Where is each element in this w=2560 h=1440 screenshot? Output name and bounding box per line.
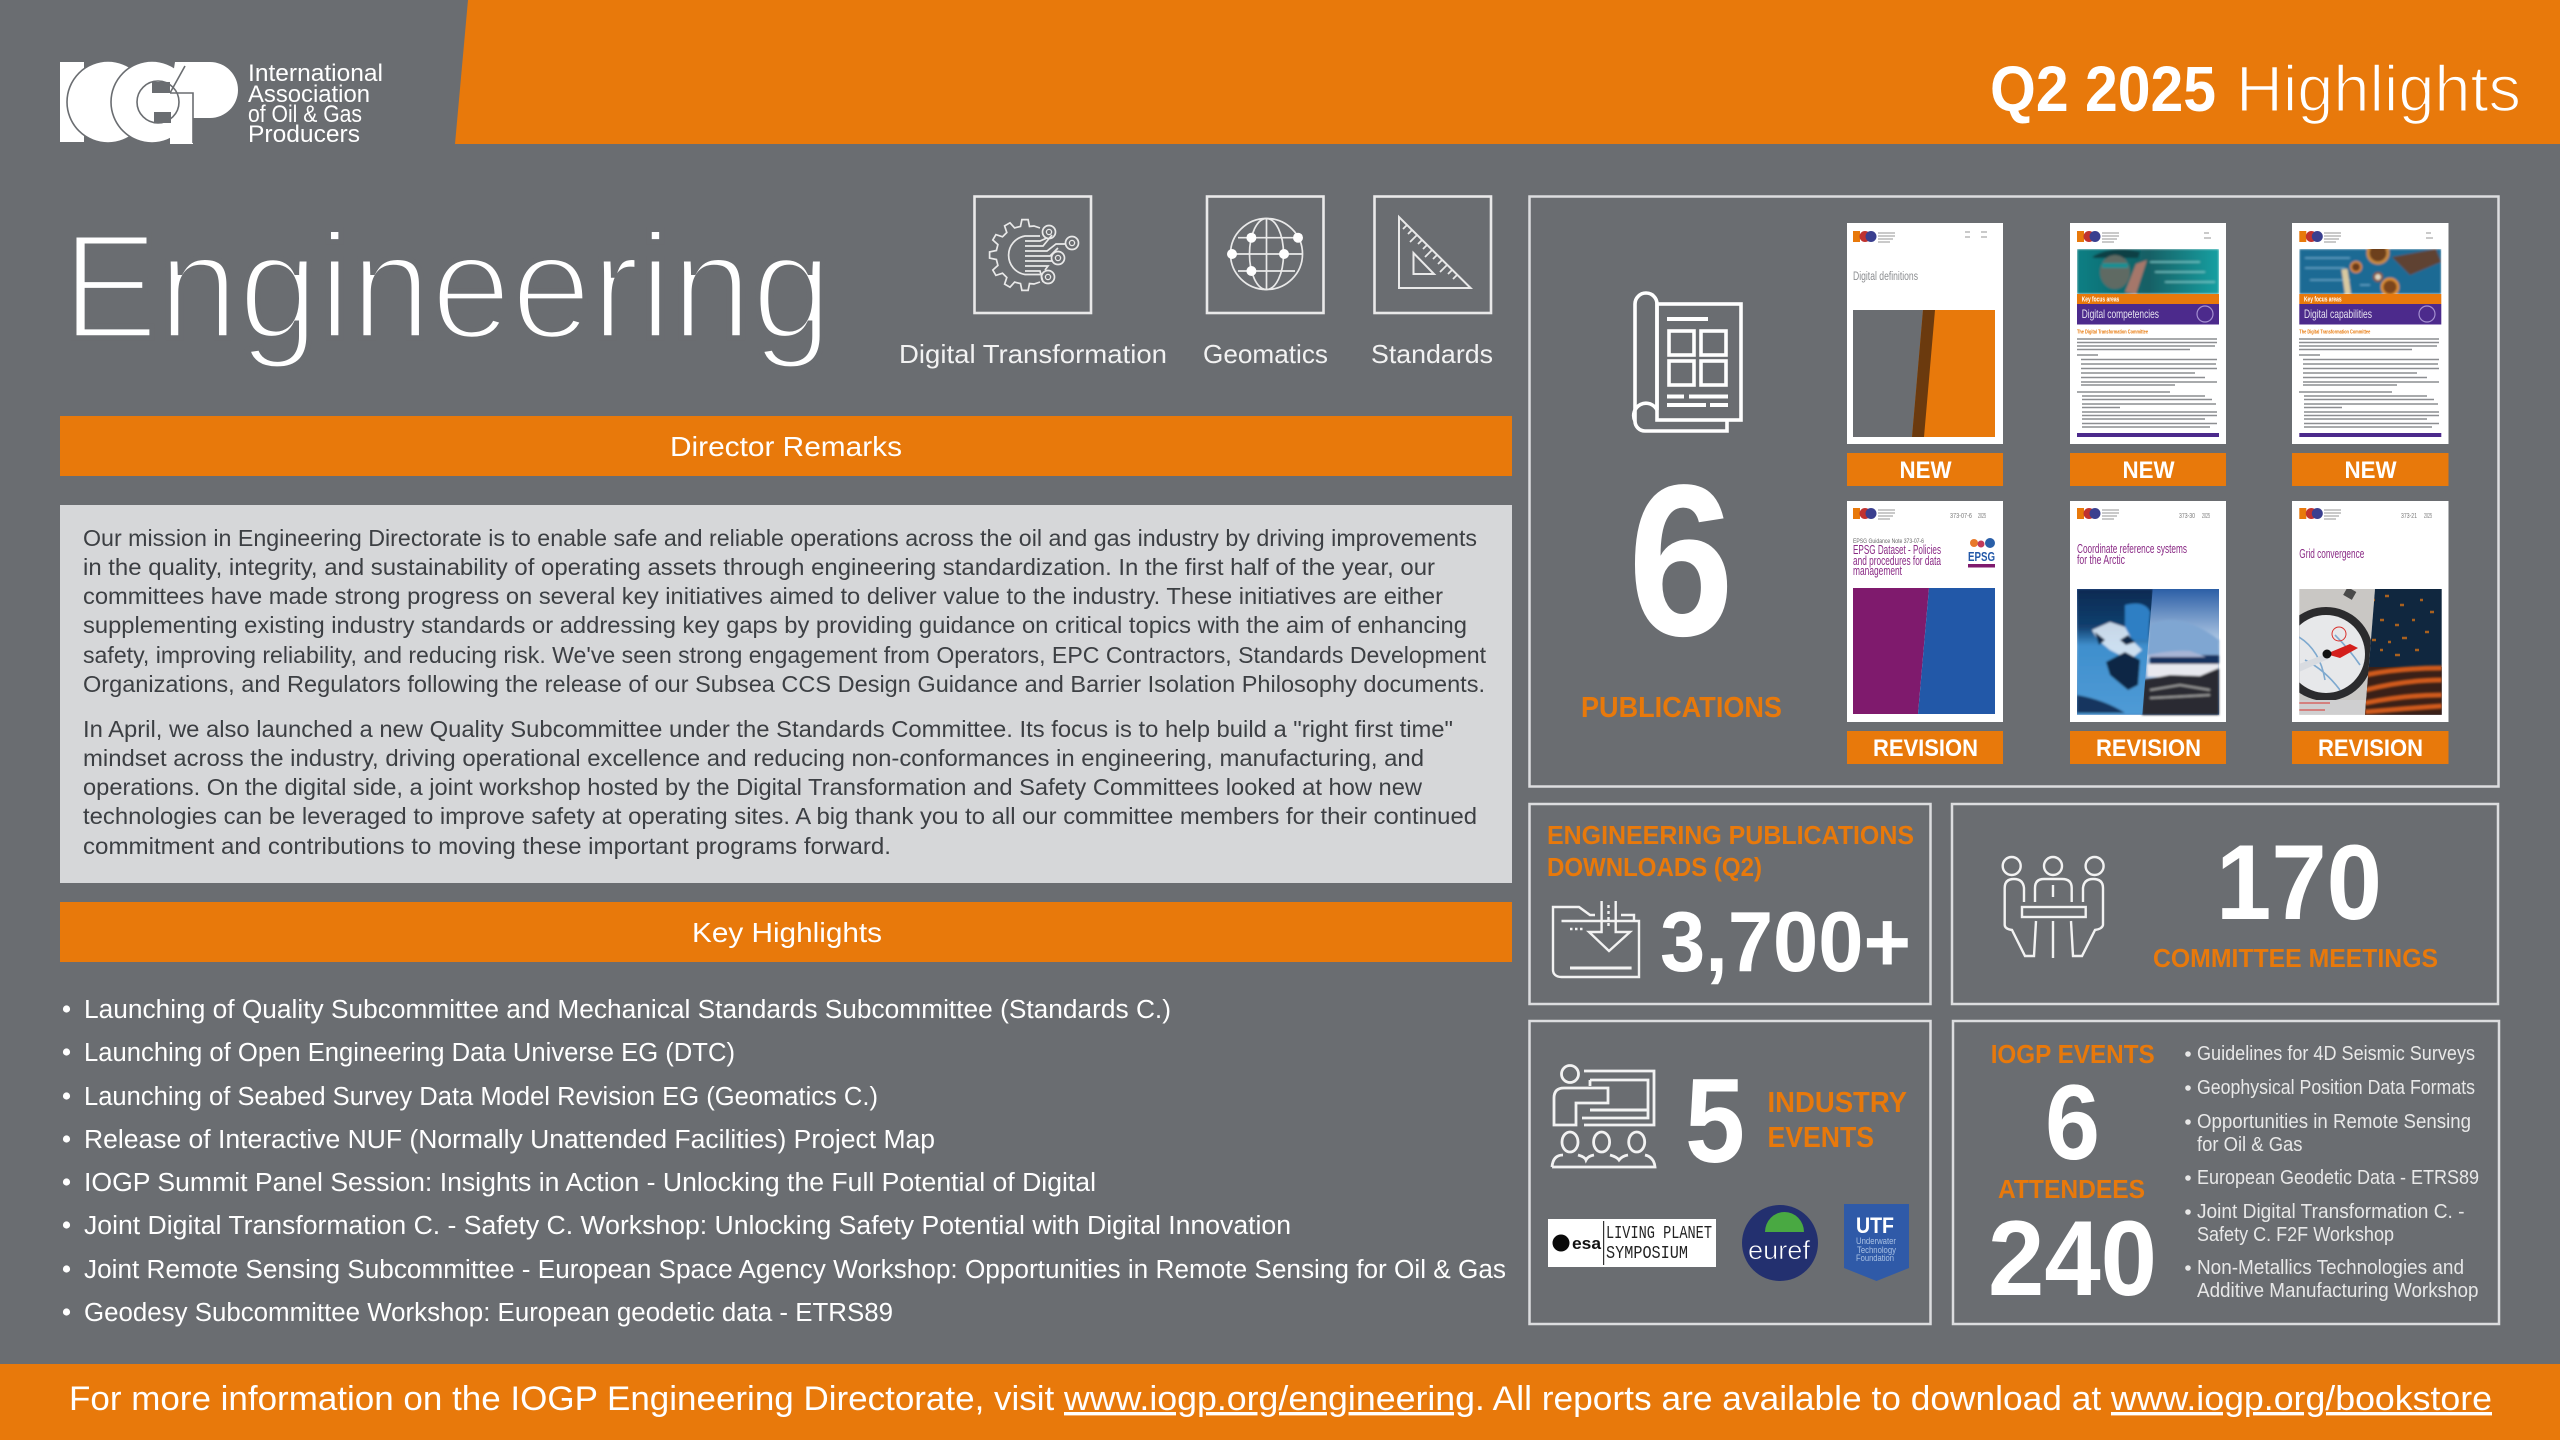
key highlights list: Launching of Seabed Survey Data Model Revision EG (Geomatics C.) (84, 1083, 878, 1111)
meetings count: 170 (2216, 822, 2382, 942)
logo wordmark: of Oil & Gas (248, 101, 362, 128)
director remarks text panel (60, 505, 1512, 883)
events list: European Geodetic Data - ETRS89 (2197, 1167, 2479, 1189)
industry events label: EVENTS (1768, 1122, 1874, 1154)
events list: Additive Manufacturing Workshop (2197, 1280, 2478, 1302)
badge: revision 1: REVISION (1873, 735, 1978, 762)
badge: revision 2: REVISION (2096, 735, 2201, 762)
header band (455, 0, 2560, 144)
thumbnail: digital capabilities: Digital capabilities (2304, 307, 2372, 321)
thumbnail: digital capabilities: Key focus areas (2304, 296, 2342, 304)
director remarks text panel: Organizations, and Regulators following the release of our Subsea CCS Design Guidance and Barrier Isolation Philosophy documents. (83, 671, 1485, 697)
logo: euref: euref (1748, 1235, 1811, 1265)
publications count: 6 (1628, 439, 1734, 681)
panel: IOGP events (1953, 1021, 2499, 1324)
events list: Joint Digital Transformation C. - (2197, 1201, 2464, 1223)
key highlights heading: Key Highlights (692, 917, 882, 948)
logo: underwater technology foundation: UTF (1856, 1213, 1894, 1238)
icon labels (899, 339, 1493, 369)
logo: underwater technology foundation: Foundation (1856, 1253, 1894, 1263)
badge: revision 2 (2070, 731, 2226, 764)
events list: for Oil & Gas (2197, 1134, 2302, 1156)
panel: publication downloads (1530, 804, 1930, 1004)
key highlights heading (60, 902, 1512, 962)
badge: new 1: NEW (1900, 457, 1952, 484)
header title (1990, 52, 2521, 125)
key highlights list: IOGP Summit Panel Session: Insights in Action - Unlocking the Full Potential of Digital (84, 1169, 1096, 1197)
thumbnail: EPSG dataset: EPSG Guidance Note 373-07-6 (1853, 538, 1924, 545)
icon: standards set square (1374, 196, 1491, 313)
footer band: www.iogp.org/bookstore (2110, 1380, 2492, 1418)
director remarks heading (60, 416, 1512, 476)
key highlights list: Release of Interactive NUF (Normally Unattended Facilities) Project Map (84, 1126, 935, 1154)
downloads heading: ENGINEERING PUBLICATIONS (1547, 820, 1914, 850)
thumbnail: EPSG dataset: 2025 (1978, 513, 1986, 520)
events list: Geophysical Position Data Formats (2197, 1077, 2475, 1099)
key highlights list (63, 996, 1506, 1327)
logo: underwater technology foundation: Technology (1857, 1245, 1896, 1255)
thumbnail: digital definitions (1847, 223, 2003, 444)
thumbnail: coordinate reference systems for the Arctic: Coordinate reference systems (2077, 542, 2187, 556)
icon: publication scroll (1634, 293, 1741, 431)
director remarks heading: Director Remarks (670, 431, 902, 462)
meetings label: COMMITTEE MEETINGS (2153, 943, 2438, 973)
publications label: PUBLICATIONS (1581, 692, 1782, 724)
badge: revision 3 (2292, 731, 2448, 764)
panel: publications (1530, 196, 2498, 786)
events list: Safety C. F2F Workshop (2197, 1224, 2394, 1246)
footer band: . All reports are available to download at (1475, 1380, 2111, 1418)
badge: new 3 (2292, 453, 2448, 486)
director remarks text panel: supplementing existing industry standards or addressing key gaps by providing guidance on critical topics with the aim of enhancing (83, 612, 1467, 638)
industry events count: 5 (1685, 1054, 1745, 1188)
icon labels: Digital Transformation (899, 339, 1167, 369)
thumbnail: digital competencies: Digital competencies (2082, 307, 2159, 321)
logo: esa living planet symposium: esa (1572, 1234, 1602, 1253)
thumbnail: coordinate reference systems for the Arctic (2070, 501, 2226, 722)
logo: esa living planet symposium (1548, 1219, 1716, 1267)
key highlights list: Geodesy Subcommittee Workshop: European geodetic data - ETRS89 (84, 1299, 893, 1327)
icon labels: Geomatics (1203, 339, 1328, 369)
director remarks text panel: technologies can be leveraged to improve safety at operating sites. A big thank you to all our committee members for their continued (83, 803, 1477, 829)
industry events label: INDUSTRY (1768, 1087, 1907, 1119)
logo: esa living planet symposium: SYMPOSIUM (1606, 1244, 1688, 1264)
director remarks text panel: mindset across the industry, driving operational excellence and reducing non-conformances in engineering, manufacturing, and (83, 745, 1424, 771)
director remarks text panel: Our mission in Engineering Directorate is to enable safe and reliable operations across the oil and gas industry by driving improvements (83, 525, 1477, 551)
attendees label: ATTENDEES (1998, 1174, 2145, 1204)
IOGP events label: IOGP EVENTS (1991, 1039, 2155, 1069)
thumbnail: EPSG dataset: management (1853, 564, 1902, 578)
logo wordmark: Producers (248, 121, 360, 148)
logo: underwater technology foundation: Underwater (1856, 1236, 1896, 1246)
director remarks text panel: operations. On the digital side, a joint workshop hosted by the Digital Transformation and Safety Committees looked at how new (83, 774, 1423, 800)
panel: committee meetings (1952, 804, 2498, 1004)
thumbnail: digital competencies: The Digital Transformation Committee (2077, 330, 2148, 336)
downloads count: 3,700+ (1660, 895, 1911, 990)
key highlights list: Joint Digital Transformation C. - Safety C. Workshop: Unlocking Safety Potential with Digital Innovation (84, 1212, 1291, 1240)
header title: Q2 2025 (1990, 53, 2216, 125)
downloads heading: DOWNLOADS (Q2) (1547, 852, 1762, 882)
page title: Engineering (62, 202, 832, 370)
badge: revision 3: REVISION (2318, 735, 2423, 762)
logo: underwater technology foundation (1844, 1204, 1909, 1281)
director remarks text panel: safety, improving reliability, and reducing risk. We've seen strong engagement from Operators, EPC Contractors, Standards Development (83, 642, 1486, 668)
thumbnail: digital capabilities (2292, 223, 2448, 444)
footer band (0, 1364, 2560, 1440)
logo wordmark (248, 60, 383, 148)
thumbnail: coordinate reference systems for the Arctic: 373-30 (2179, 513, 2195, 520)
thumbnail: coordinate reference systems for the Arctic: for the Arctic (2077, 553, 2125, 567)
thumbnail: EPSG dataset: and procedures for data (1853, 554, 1941, 568)
badge: new 2 (2070, 453, 2226, 486)
director remarks text panel: in the quality, integrity, and sustainability of operating assets through engineering standardization. In the first half of the year, our (83, 554, 1435, 580)
badge: new 1 (1847, 453, 2003, 486)
icon labels: Standards (1371, 339, 1493, 369)
logo: esa living planet symposium: LIVING PLANET (1606, 1224, 1712, 1244)
panel: industry events (1530, 1021, 1930, 1324)
IOGP events count: 6 (2045, 1062, 2100, 1182)
events list: Non-Metallics Technologies and (2197, 1257, 2464, 1279)
logo wordmark: International (248, 60, 383, 87)
badge: new 2: NEW (2122, 457, 2175, 484)
icon: presenter and audience (1552, 1066, 1655, 1167)
footer band: www.iogp.org/engineering (1063, 1380, 1475, 1418)
thumbnail: grid convergence: 2025 (2424, 513, 2432, 520)
IOGP logo (60, 60, 383, 148)
thumbnail: digital definitions: Digital definitions (1853, 271, 1918, 283)
icon: meeting table (2003, 857, 2104, 958)
logo wordmark: Association (248, 81, 370, 108)
director remarks text panel: commitment and contributions to moving these important programs forward. (83, 833, 891, 859)
thumbnail: EPSG dataset: 373-07-6 (1950, 513, 1972, 520)
header title: Highlights (2236, 52, 2521, 125)
thumbnail: digital competencies (2070, 223, 2226, 444)
attendees count: 240 (1988, 1198, 2157, 1318)
key highlights list: Launching of Open Engineering Data Universe EG (DTC) (84, 1039, 735, 1067)
director remarks text panel: committees have made strong progress on several key initiatives aimed to deliver value to the industry. These initiatives are either (83, 583, 1443, 609)
events list: Guidelines for 4D Seismic Surveys (2197, 1043, 2475, 1065)
industry events label (1768, 1087, 1907, 1154)
events list: Opportunities in Remote Sensing (2197, 1111, 2471, 1133)
thumbnail: grid convergence: 373-21 (2401, 513, 2417, 520)
thumbnail: grid convergence: Grid convergence (2299, 547, 2364, 561)
key highlights list: Launching of Quality Subcommittee and Mechanical Standards Subcommittee (Standards C.) (84, 996, 1171, 1024)
thumbnail: EPSG dataset: EPSG (1968, 549, 1995, 564)
downloads heading (1547, 820, 1914, 882)
thumbnail: EPSG dataset (1847, 501, 2003, 722)
key highlights list: Joint Remote Sensing Subcommittee - European Space Agency Workshop: Opportunities in Remote Sensing for Oil & Gas (84, 1256, 1506, 1284)
events list (2185, 1043, 2479, 1302)
thumbnail: digital competencies: Key focus areas (2082, 296, 2119, 304)
thumbnail: digital capabilities: The Digital Transformation Committee (2299, 330, 2370, 336)
icon: geomatics globe (1207, 196, 1324, 313)
badge: revision 1 (1847, 731, 2003, 764)
thumbnail: EPSG dataset: EPSG Dataset - Policies (1853, 543, 1941, 557)
director remarks text panel: In April, we also launched a new Quality Subcommittee under the Standards Committee. Its focus is to help build a "right first time" (83, 716, 1453, 742)
thumbnail: coordinate reference systems for the Arctic: 2025 (2202, 513, 2210, 520)
footer band: For more information on the IOGP Engineering Directorate, visit (69, 1380, 1064, 1418)
icon: folder download (1553, 901, 1639, 977)
icon: digital transformation (974, 196, 1091, 313)
thumbnail: grid convergence (2279, 501, 2448, 722)
logo: euref (1742, 1205, 1818, 1281)
badge: new 3: NEW (2344, 457, 2397, 484)
